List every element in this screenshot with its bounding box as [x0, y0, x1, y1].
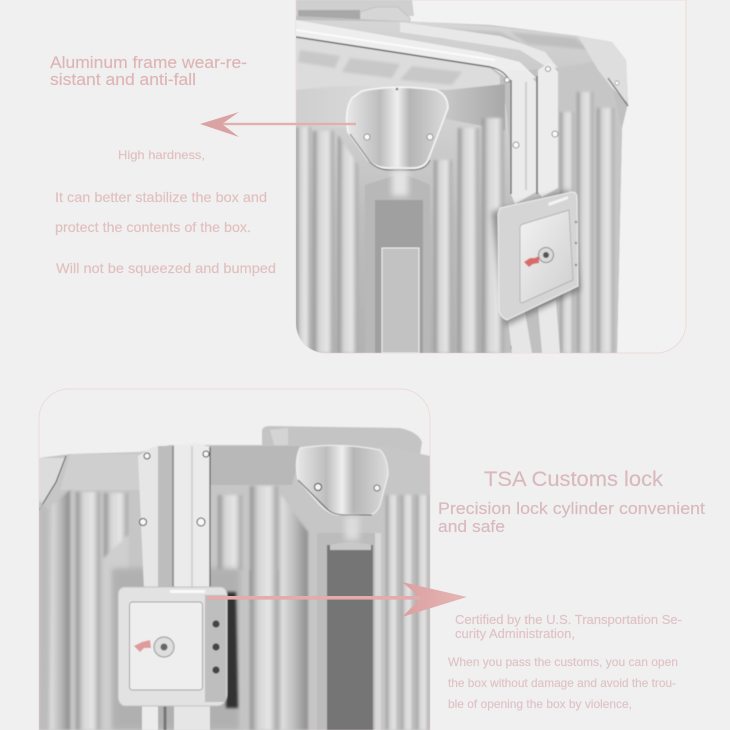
panel: TSA lock photo [39, 389, 430, 730]
arrow: pointing right from lock [207, 582, 467, 617]
frame bands [509, 78, 536, 204]
text block: aluminum frame description: High hardness, [118, 148, 205, 162]
top face [300, 20, 592, 70]
text block: aluminum frame heading [50, 54, 247, 89]
text block: aluminum frame heading: Aluminum frame wear-re- [50, 54, 247, 72]
handle recess [317, 516, 381, 730]
front shoulder [296, 86, 510, 353]
back rail [400, 22, 558, 68]
text block: TSA description: the box without damage and avoid the trou- [448, 676, 676, 690]
text block: aluminum frame description: protect the contents of the box. [55, 219, 251, 235]
vertical ribs [296, 118, 504, 353]
frame rivets [504, 66, 558, 350]
TSA lock [118, 587, 238, 708]
text block: TSA heading [438, 468, 705, 536]
arrow: pointing left from corner [200, 112, 356, 137]
top rail [296, 20, 536, 80]
frame rivets [140, 451, 209, 526]
corner cap [347, 87, 448, 170]
panel: aluminum frame photo [296, 0, 686, 353]
text block: aluminum frame description: It can better stabilize the box and [55, 189, 267, 205]
top-right corner cap [578, 36, 628, 103]
text block: aluminum frame heading: sistant and anti-fall [50, 71, 196, 89]
right side panel [558, 60, 622, 353]
ribs [39, 486, 429, 730]
lock recess shadow [112, 568, 240, 730]
suitcase body [39, 445, 430, 730]
text block: TSA heading: TSA Customs lock [484, 468, 664, 491]
text block: TSA description [448, 613, 682, 711]
text block: TSA heading: Precision lock cylinder convenient [438, 500, 705, 518]
handle recess [365, 170, 430, 353]
text block: TSA description: When you pass the customs, you can open [448, 655, 678, 669]
text block: TSA description: ble of opening the box by violence, [448, 697, 632, 711]
text block: TSA description: curity Administration, [455, 627, 575, 641]
handle [296, 0, 414, 22]
text block: TSA heading: and safe [438, 518, 505, 536]
suitcase body [296, 16, 628, 353]
text block: aluminum frame description [55, 148, 276, 276]
TSA lock [492, 190, 580, 326]
text block: TSA description: Certified by the U.S. Transportation Se- [455, 613, 682, 627]
corner cap [296, 445, 388, 515]
luggage handle [262, 426, 422, 455]
frame bands [138, 446, 158, 590]
text block: aluminum frame description: Will not be squeezed and bumped [56, 260, 276, 276]
